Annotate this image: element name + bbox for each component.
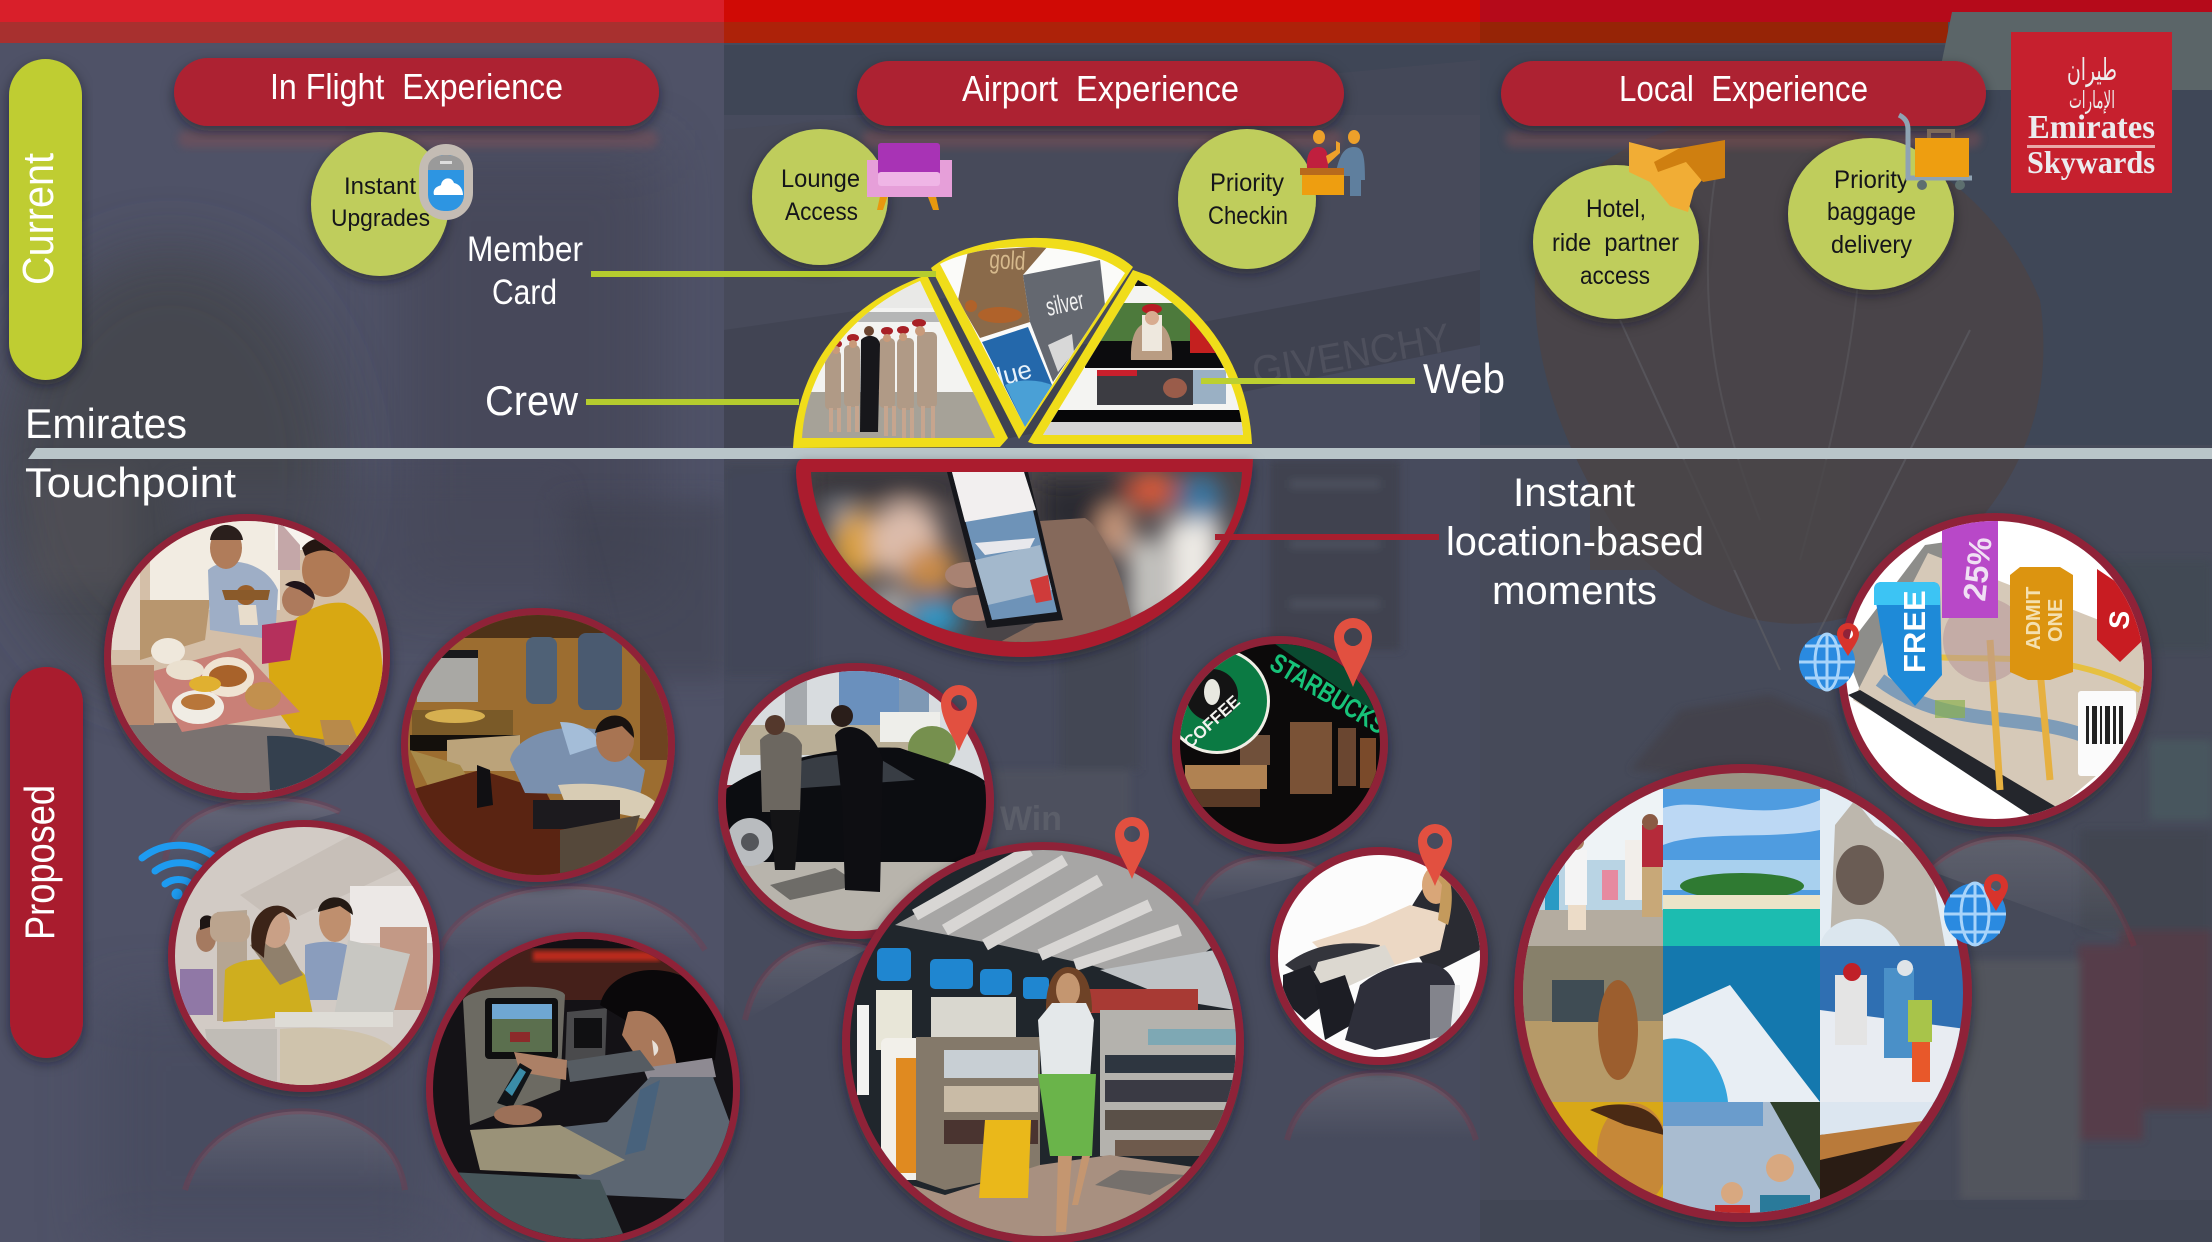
bubble: Instant Upgrades: Instant — [344, 173, 416, 200]
photo: airport shop — [840, 842, 1250, 1242]
heading: Airport Experience — [857, 61, 1344, 126]
bubble: Instant Upgrades — [311, 132, 449, 276]
photo: massage chair — [1270, 847, 1490, 1065]
heading: In Flight Experience: In Flight Experience — [270, 66, 563, 107]
icon: location pin on massage photo — [1418, 824, 1452, 886]
proposed touchpoint half circle: mobile phone — [796, 459, 1253, 657]
photo: Starbucks: STARBUCKS — [1265, 647, 1392, 740]
icon: globe on collage photo — [1944, 883, 2006, 945]
reflections beneath the photo circles — [165, 798, 2134, 1190]
photo: coupons on a map: S — [2103, 609, 2136, 631]
photo: coupons on a map — [1838, 513, 2160, 835]
photo: coupons on a map: 25% — [1956, 535, 1999, 603]
label: Web: Web — [1423, 355, 1505, 402]
photo: coupons on a map: ADMIT — [2023, 587, 2045, 650]
heading: Local Experience: Local Experience — [1619, 68, 1868, 109]
connector: member card — [591, 271, 936, 277]
label: Instant location-based moments: location-based — [1446, 520, 1704, 564]
label: Instant location-based moments: Instant — [1513, 471, 1635, 515]
label: Emirates: Emirates — [25, 400, 187, 447]
current touchpoint wedge: member card — [930, 238, 1140, 440]
label: Instant location-based moments: moments — [1492, 569, 1657, 613]
photo: in-seat gaming — [425, 930, 745, 1242]
bubble: Lounge Access: Lounge — [781, 165, 860, 193]
icon: location pin on car photo — [941, 685, 977, 751]
bubble: Lounge Access: Access — [785, 198, 858, 226]
background: three faded photo columns: Win — [1000, 800, 1062, 838]
bubble: Priority baggage delivery: delivery — [1831, 231, 1912, 259]
reflection bands beneath the heading pills — [178, 130, 1981, 148]
current touchpoint wedge: member card: silver — [1043, 285, 1087, 322]
photo: coupons on a map: ONE — [2045, 599, 2067, 642]
photo: chauffeur car — [718, 663, 995, 939]
logo: Emirates Skywards: طيران — [2067, 53, 2117, 88]
icon: globe on coupons photo — [1799, 634, 1855, 690]
bubble: Priority Checkin: Checkin — [1208, 202, 1288, 230]
icon: wifi — [142, 845, 216, 897]
photo: coupons on a map: FREE — [1897, 590, 1932, 673]
label: Touchpoint: Touchpoint — [25, 459, 236, 506]
bubble: Hotel, ride partner access: ride partner — [1552, 229, 1679, 257]
bubble: Priority Checkin — [1178, 129, 1316, 269]
background: three faded photo columns: GIVENCHY — [1249, 316, 1454, 394]
connector: web — [1201, 378, 1415, 384]
icon: airplane window — [419, 144, 473, 220]
connector: crew — [586, 399, 799, 405]
bubble: Hotel, ride partner access: access — [1580, 262, 1650, 290]
bubble: Priority baggage delivery: Priority — [1834, 166, 1909, 194]
label: Instant location-based moments — [1446, 471, 1704, 613]
photo: first class suite — [400, 608, 680, 890]
heading: In Flight Experience — [174, 58, 659, 126]
photo: Starbucks: COFFEE — [1180, 692, 1244, 752]
bubble: Lounge Access — [752, 129, 888, 265]
current touchpoint wedge: web — [1028, 270, 1252, 444]
heading: Airport Experience: Airport Experience — [962, 68, 1239, 109]
photo: Starbucks — [1164, 636, 1392, 855]
row label: Proposed: Proposed — [16, 785, 63, 940]
label: Member Card: Member — [467, 230, 583, 269]
photo: wifi couple — [168, 820, 440, 1092]
icon: location pin on shop photo — [1115, 817, 1149, 879]
bubble: Priority baggage delivery — [1788, 138, 1954, 290]
photo: travel collage — [1514, 764, 1974, 1230]
logo: Emirates Skywards: الإمارات — [2069, 86, 2115, 114]
label: Member Card: Card — [492, 273, 557, 312]
top red band — [0, 0, 2212, 90]
label: Member Card — [467, 230, 583, 312]
logo: Emirates Skywards: Skywards — [2027, 144, 2155, 180]
row label: Proposed — [10, 667, 83, 1058]
row label: Current: Current — [14, 153, 63, 285]
logo: Emirates Skywards: Emirates — [2028, 109, 2155, 146]
heading: Local Experience — [1501, 61, 1986, 126]
icon: location pin on Starbucks photo — [1334, 618, 1372, 687]
current touchpoint wedge: member card: gold — [989, 244, 1026, 276]
divider line — [28, 448, 2212, 459]
icon: location pin on collage photo — [1984, 874, 2008, 911]
icon: handshake — [1629, 140, 1725, 212]
icon: lounge sofa — [867, 143, 952, 210]
icon: location pin on coupons photo — [1837, 623, 1859, 656]
bubble: Instant Upgrades: Upgrades — [331, 205, 430, 232]
bubble: Hotel, ride partner access — [1533, 165, 1699, 319]
bubble: Priority baggage delivery: baggage — [1827, 198, 1916, 226]
logo: Emirates Skywards — [2011, 32, 2172, 193]
current touchpoint wedge: member card: lue — [994, 354, 1035, 392]
row label: Current — [9, 59, 82, 380]
current touchpoint wedge: crew — [790, 270, 1010, 448]
bubble: Hotel, ride partner access: Hotel, — [1586, 195, 1646, 223]
connector: location moments — [1215, 534, 1439, 540]
photo: family meal — [100, 510, 400, 810]
icon: baggage trolley — [1899, 115, 1972, 190]
icon: check-in desk — [1300, 130, 1365, 196]
bubble: Priority Checkin: Priority — [1210, 169, 1284, 197]
label: Crew: Crew — [485, 377, 579, 424]
